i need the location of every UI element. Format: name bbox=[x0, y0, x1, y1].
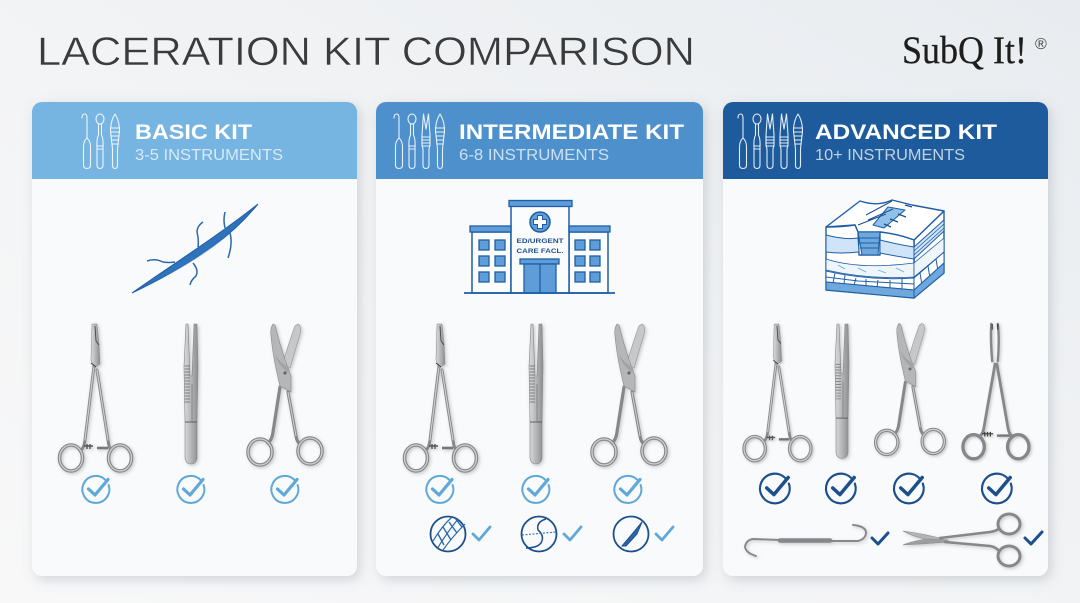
hospital sign text: ED/URGENT bbox=[516, 238, 564, 245]
panel: advanced kit bbox=[723, 102, 1048, 576]
small check bbox=[564, 527, 581, 540]
scissors with check bbox=[592, 324, 666, 503]
intermediate kit instrument count: 6-8 INSTRUMENTS bbox=[459, 147, 609, 164]
check mark bbox=[894, 474, 924, 503]
intermediate kit header bbox=[376, 102, 703, 179]
basic kit header bbox=[32, 102, 357, 179]
panel: intermediate kit bbox=[376, 102, 703, 576]
scissors with check bbox=[248, 324, 322, 503]
check mark bbox=[982, 474, 1012, 503]
icon: laceration wound bbox=[132, 204, 258, 293]
hemostat with check bbox=[404, 324, 476, 503]
check mark bbox=[426, 476, 453, 503]
intermediate kit heading: INTERMEDIATE KIT bbox=[459, 121, 684, 144]
scissors with check bbox=[876, 323, 944, 503]
basic kit heading: BASIC KIT bbox=[135, 121, 252, 144]
panel: basic kit bbox=[32, 102, 357, 576]
hemostat with check bbox=[60, 324, 132, 503]
clamp with check bbox=[963, 324, 1029, 503]
logo: SubQ It!: SubQ It! bbox=[902, 29, 1027, 72]
forceps with check bbox=[826, 324, 856, 503]
check mark bbox=[614, 476, 641, 503]
check mark bbox=[522, 476, 549, 503]
small check bbox=[473, 527, 490, 540]
advanced kit heading: ADVANCED KIT bbox=[815, 121, 997, 144]
icon: advanced instruments bbox=[738, 114, 802, 168]
icon: wound closure with check bbox=[522, 516, 581, 552]
small check bbox=[1025, 532, 1042, 544]
check mark bbox=[826, 474, 856, 503]
small check bbox=[656, 527, 673, 540]
small check bbox=[872, 533, 888, 544]
surgical hook with check bbox=[745, 525, 888, 556]
icon: braided suture with check bbox=[430, 516, 490, 552]
forceps with check bbox=[177, 324, 204, 503]
basic kit instrument count: 3-5 INSTRUMENTS bbox=[135, 147, 283, 164]
check mark bbox=[82, 476, 109, 503]
horizontal scissors with check bbox=[903, 514, 1042, 566]
check mark bbox=[177, 476, 204, 503]
icon: hospital bbox=[464, 200, 615, 293]
check mark bbox=[271, 476, 298, 503]
icon: needle with check bbox=[614, 516, 673, 552]
hemostat with check bbox=[744, 324, 811, 503]
icon: basic instruments bbox=[82, 114, 120, 168]
icon: skin layers with sutures bbox=[826, 200, 944, 298]
title: LACERATION KIT COMPARISON bbox=[37, 30, 695, 74]
check mark bbox=[760, 474, 790, 503]
advanced kit header bbox=[723, 102, 1048, 179]
logo: SubQ It!: ® bbox=[1035, 36, 1047, 53]
advanced kit instrument count: 10+ INSTRUMENTS bbox=[815, 147, 965, 164]
forceps with check bbox=[522, 324, 549, 503]
icon: hospital: CARE FACL. bbox=[516, 248, 564, 255]
icon: intermediate instruments bbox=[394, 114, 444, 168]
